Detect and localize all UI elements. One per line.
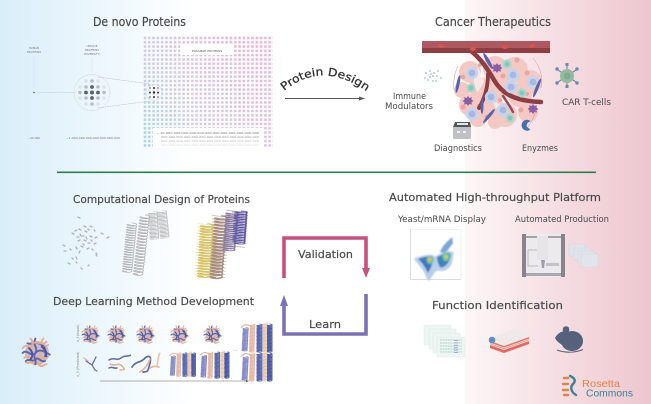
label: enzymes: Enyzmes	[522, 144, 559, 154]
panel: protein space diagram: ~1,000,000,000,000,000,000,000	[66, 136, 120, 140]
panel: tumor microenvironment	[422, 41, 550, 130]
panel: helix backbone outline	[122, 210, 169, 276]
icon: liquid handling robot	[522, 234, 565, 277]
label: viable protein diversity	[84, 44, 100, 56]
blood vessels	[470, 50, 541, 112]
heading: Function Identification: Function Identification	[432, 299, 563, 312]
heading: Cancer Therapeutics: Cancer Therapeutics	[435, 15, 551, 29]
panel: colored helix bundle	[198, 210, 247, 279]
label: CAR T-cells: CAR T-cells	[562, 98, 612, 108]
heading: De novo Proteins: De novo Proteins	[93, 15, 186, 29]
main vessel	[422, 41, 550, 53]
tumor tissue	[454, 56, 542, 129]
label: immune modulators: Modulators	[385, 102, 434, 112]
immune and tumor cells	[455, 52, 542, 124]
possible proteins dot grid: 000,000,000,000,000,000,000,000,000,000,000,000,000	[161, 139, 259, 143]
input protein	[23, 339, 50, 366]
label: immune modulators: Immune	[393, 92, 426, 102]
arrow: protein design	[285, 96, 365, 100]
label: yeast display: Yeast/mRNA Display	[397, 215, 486, 225]
rotated axis labels: x_t (Input)	[76, 324, 80, 342]
heading: Deep Learning Method Development: Deep Learning Method Development	[53, 295, 255, 308]
label: viable protein diversity: UNIQUE	[87, 44, 98, 48]
logo: Rosetta Commons	[563, 376, 633, 400]
heading: Computational Design of Proteins: Computational Design of Proteins	[73, 193, 250, 206]
label: human proteins	[27, 46, 41, 54]
possible proteins dot grid: ~ 10,000,000,000,000,000,000,000,000,000,000,000,000	[156, 131, 259, 135]
label: learn: Learn	[309, 318, 341, 331]
label: diagnostics: Diagnostics	[434, 144, 483, 154]
logo: Rosetta Commons: Commons	[586, 388, 633, 400]
rotated axis labels: x_0 (Predicted)	[76, 351, 80, 377]
cycle: validation arrow	[284, 238, 370, 278]
label: automated production: Automated Production	[515, 215, 609, 225]
icon: CAR T-cell	[555, 63, 579, 88]
panel: deep learning structure series	[23, 323, 272, 382]
panel: protein space diagram	[27, 36, 273, 148]
cycle: learn arrow	[280, 294, 366, 334]
label: human proteins: HUMAN	[29, 46, 39, 50]
divider	[57, 172, 596, 173]
logo: Rosetta Commons: Rosetta	[582, 378, 620, 390]
icon: diagnostics machine	[453, 122, 471, 139]
possible proteins dot grid: 000,000,000,000,000,000,000,000,000,000,000,000,000	[161, 143, 259, 147]
label: viable protein diversity: PROTEINS	[85, 48, 99, 52]
icon: mouse	[555, 326, 583, 352]
label: validation: Validation	[298, 248, 353, 261]
rotated axis labels	[76, 324, 80, 377]
possible proteins dot grid	[143, 36, 273, 148]
possible proteins dot grid: 000,000,000,000,000,000,000,000,000,000,000,000,000	[161, 135, 259, 139]
label: viable protein diversity: (DIVERSITY)	[84, 52, 100, 56]
icon: immune modulators	[424, 70, 442, 82]
chart: flow cytometry plot	[410, 230, 461, 281]
possible proteins dot grid: POSSIBLE PROTEINS	[192, 49, 222, 53]
icon: well plates	[569, 244, 598, 267]
input row	[82, 323, 272, 352]
predicted row	[84, 351, 272, 381]
icon: assay sheets	[424, 325, 465, 357]
magnified dot circle	[74, 74, 110, 110]
label: immune modulators	[385, 92, 434, 112]
icon: culture flask	[489, 328, 529, 353]
panel: unstructured residues	[63, 217, 109, 269]
curved label: Protein Design: Protein Design	[280, 68, 368, 91]
heading: Automated High-throughput Platform: Automated High-throughput Platform	[389, 191, 601, 204]
icon: enzyme	[522, 120, 530, 131]
label: counts: ~20,000	[28, 136, 40, 140]
panel: deep learning structure series: ...	[233, 347, 238, 353]
label: human proteins: PROTEINS	[27, 50, 41, 54]
